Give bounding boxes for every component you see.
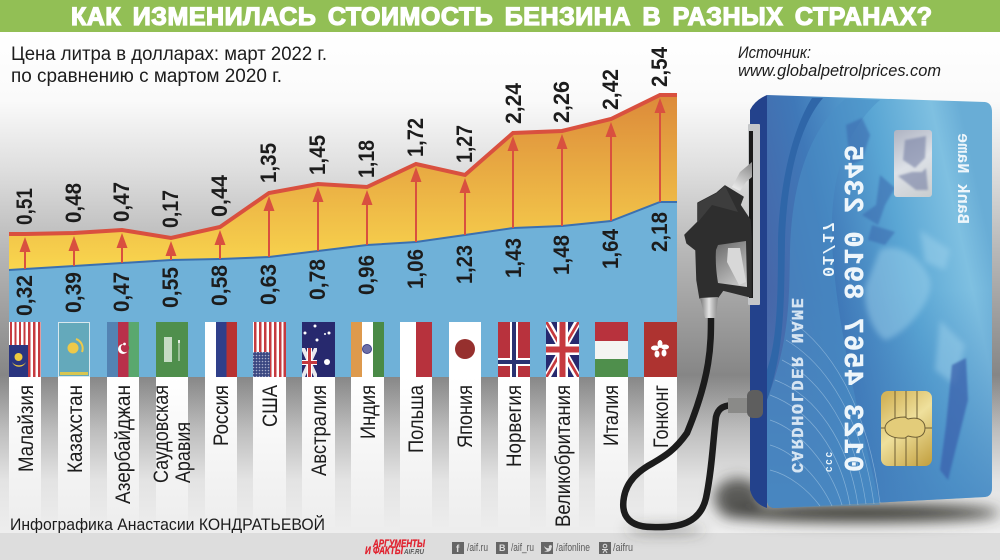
country labels: Азербайджан (112, 385, 135, 504)
values: March 2022: 2,26 (549, 81, 574, 123)
values: March 2022: 2,54 (647, 46, 672, 87)
flag: USA (253, 322, 286, 377)
values: March 2020: 0,58 (207, 265, 232, 306)
country labels: Казахстан (64, 385, 87, 473)
country labels: Гонконг (650, 385, 673, 448)
source note: Источник: (738, 43, 811, 62)
social: vk (496, 542, 534, 554)
footer bar (0, 533, 1000, 560)
social: twitter (541, 542, 590, 554)
country labels: Австралия (308, 385, 331, 476)
social: twitter: /aifonline (556, 542, 590, 554)
values: March 2020: 1,48 (549, 235, 574, 275)
credit card (748, 95, 992, 508)
values: March 2022: 0,17 (158, 190, 183, 228)
flag: Japan (449, 322, 481, 377)
card face (767, 95, 992, 508)
label strips under flags (9, 377, 677, 527)
flag: Australia (302, 322, 335, 377)
country labels: Италия (600, 385, 623, 446)
flag: Hong Kong (644, 322, 677, 377)
nozzle spout (732, 162, 752, 191)
values: March 2020: 0,47 (109, 272, 134, 312)
social: odnoklassniki (599, 542, 633, 554)
values: March 2020: 0,63 (256, 264, 281, 305)
country labels: Индия (357, 385, 380, 439)
values: March 2020: 0,32 (12, 275, 37, 316)
social: facebook: /aif.ru (467, 542, 488, 554)
subtitle: Цена литра в долларах: март 2022 г. (11, 44, 327, 65)
hose connector (728, 390, 763, 418)
values: March 2020: 1,23 (452, 245, 477, 284)
source note (738, 43, 941, 80)
country labels: США (259, 385, 282, 427)
AIF logo (365, 538, 426, 557)
values: March 2022: 0,44 (207, 174, 232, 217)
country labels: Польша (405, 385, 428, 453)
AIF logo: АРГУМЕНТЫ (372, 538, 426, 550)
values: March 2022: 0,47 (109, 182, 134, 222)
social links (452, 542, 633, 555)
flag: Russia (205, 322, 237, 377)
values: March 2022: 2,24 (501, 82, 526, 124)
card guilloche lines (770, 320, 880, 506)
line: March 2022 (9, 95, 677, 238)
values: March 2020: 1,64 (598, 228, 623, 269)
expiry date: 01/17 (817, 222, 836, 277)
flags (9, 322, 677, 377)
values: March 2020: 0,96 (354, 255, 379, 295)
flag: Saudi Arabia (156, 322, 188, 377)
flag: Malaysia (9, 322, 41, 377)
values: March 2020: 2,18 (647, 212, 672, 252)
nozzle handle window (716, 241, 747, 287)
credit: Инфографика Анастасии КОНДРАТЬЕВОЙ (10, 515, 325, 534)
source note: www.globalpetrolprices.com (738, 61, 941, 80)
values: March 2022: 1,27 (452, 125, 477, 163)
country labels: Норвегия (503, 385, 526, 467)
values: March 2020 (12, 212, 672, 316)
subtitle (11, 44, 327, 87)
title banner: КАК ИЗМЕНИЛАСЬ СТОИМОСТЬ БЕНЗИНА В РАЗНЫХ СТРАНАХ? (71, 3, 932, 31)
values: March 2022: 1,72 (403, 118, 428, 157)
nozzle collar (700, 297, 718, 318)
AIF logo: AIF.RU (403, 547, 424, 556)
country labels: Саудовская (150, 385, 173, 483)
social: vk: B (499, 543, 506, 553)
values: March 2020: 0,55 (158, 267, 183, 308)
values: March 2022: 0,48 (61, 183, 86, 223)
area: price increase to 2022 (9, 95, 677, 270)
chip (881, 391, 932, 466)
area: 2020 prices (9, 202, 677, 377)
country labels: Великобритания (552, 385, 575, 527)
flag: Azerbaijan (107, 322, 139, 377)
flag: Kazakhstan (58, 322, 90, 376)
nozzle body (685, 186, 751, 298)
flag: India (351, 322, 384, 377)
values: March 2022: 1,35 (256, 143, 281, 183)
values: March 2022: 1,45 (305, 135, 330, 175)
flag: Great Britain (546, 322, 579, 377)
flag: Norway (498, 322, 530, 377)
values: March 2022: 1,18 (354, 140, 379, 178)
values: March 2022: 0,51 (12, 188, 37, 225)
values: March 2022 (12, 46, 672, 228)
arrows: price growth (20, 98, 666, 269)
fuel nozzle (685, 162, 752, 318)
card shadow (625, 478, 1000, 532)
area chart: price per litre (9, 95, 677, 377)
AIF logo: И ФАКТЫ (365, 545, 404, 557)
social: vk: /aif_ru (511, 542, 534, 554)
values: March 2020: 1,43 (501, 238, 526, 278)
subtitle: по сравнению с мартом 2020 г. (11, 66, 282, 87)
flag: Poland (400, 322, 432, 377)
nozzle holder (748, 124, 760, 305)
line: March 2020 (9, 202, 677, 270)
values: March 2022: 2,42 (598, 69, 623, 110)
social: facebook: f (456, 544, 460, 555)
social: facebook (452, 542, 488, 555)
card security code: CCC (823, 451, 833, 472)
card map (846, 118, 895, 245)
social: odnoklassniki: /aifru (613, 542, 633, 554)
card edge (750, 95, 767, 508)
values: March 2020: 0,78 (305, 259, 330, 300)
country labels (15, 385, 673, 527)
card swoosh (767, 98, 823, 400)
values: March 2020: 0,39 (61, 272, 86, 313)
card number: 0123 4567 8910 2345 (836, 145, 866, 472)
country labels: Япония (454, 385, 477, 448)
bank name: Bank Name (952, 133, 971, 224)
flag: Hungary (595, 322, 628, 377)
values: March 2020: 1,06 (403, 249, 428, 289)
hologram (894, 130, 932, 197)
cardholder name: CARDHOLDER NAME (786, 298, 805, 473)
country labels: Аравия (172, 422, 195, 483)
country labels: Малайзия (15, 385, 38, 472)
fuel hose (623, 316, 732, 527)
country labels: Россия (210, 385, 233, 446)
